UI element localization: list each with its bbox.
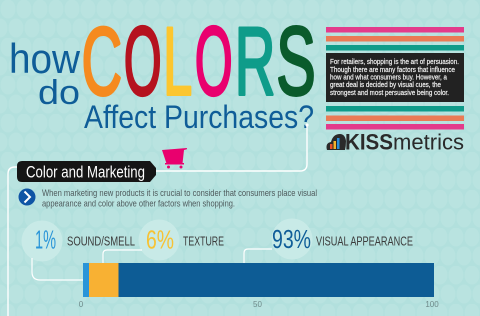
title: COLORS: S bbox=[276, 8, 316, 116]
intro text box bbox=[326, 53, 464, 102]
axis labels: 0 bbox=[79, 300, 84, 309]
axis labels: 50 bbox=[253, 300, 262, 309]
bottom stripes bbox=[326, 106, 464, 130]
intro text box: For retailers, shopping is the art of persuasion. bbox=[330, 59, 459, 66]
stat: 93% visual appearance: VISUAL APPEARANCE bbox=[316, 234, 413, 248]
stat: 1% sound/smell: SOUND/SMELL bbox=[67, 234, 135, 248]
text: marketing note: When marketing new products it is crucial to consider that consumers place visual bbox=[42, 188, 317, 199]
stat: 1% sound/smell bbox=[22, 220, 135, 280]
top stripes bbox=[326, 27, 464, 50]
icon: chevron bullet bbox=[18, 188, 36, 206]
stat: 93% visual appearance bbox=[244, 218, 413, 263]
intro text box: great deal is decided by visual cues, the bbox=[330, 82, 441, 89]
stat: 6% texture: TEXTURE bbox=[183, 234, 224, 248]
title: COLORS: L bbox=[163, 6, 192, 116]
intro text box: Though there are many factors that influence bbox=[330, 67, 455, 74]
title: how do bbox=[9, 35, 81, 112]
axis labels: 100 bbox=[425, 300, 439, 309]
heading: Color and Marketing: Color and Marketing bbox=[26, 164, 145, 182]
intro text box: strongest and most persuasive being color. bbox=[330, 90, 449, 97]
intro text box: how and what consumers buy. However, a bbox=[330, 74, 447, 82]
stat: 93% visual appearance: 93% bbox=[272, 224, 311, 254]
title: COLORS: C bbox=[82, 6, 122, 115]
panel: intro bbox=[326, 27, 464, 130]
stat: 1% sound/smell: 1% bbox=[35, 224, 56, 254]
stat: 6% texture: 6% bbox=[146, 224, 174, 254]
icon: cloud chart bbox=[326, 134, 346, 150]
connector line bbox=[8, 125, 307, 316]
stat: 6% texture bbox=[103, 220, 224, 263]
title: Affect Purchases?: Affect Purchases? bbox=[84, 99, 314, 135]
title: COLORS: O bbox=[195, 8, 233, 116]
title: COLORS: R bbox=[235, 6, 275, 115]
title bbox=[9, 6, 316, 135]
axis labels bbox=[79, 300, 439, 309]
icon: shopping cart bbox=[162, 148, 187, 168]
title: how do: how bbox=[9, 35, 81, 82]
logo: KISSmetrics: metrics bbox=[393, 130, 464, 154]
title: COLORS bbox=[82, 6, 316, 116]
logo: KISSmetrics: KISS bbox=[345, 130, 393, 154]
title: how do: do bbox=[38, 74, 80, 112]
text: marketing note bbox=[42, 188, 317, 210]
title: COLORS: O bbox=[124, 8, 162, 116]
logo: KISSmetrics bbox=[326, 130, 464, 154]
bar chart bbox=[79, 263, 439, 309]
text: marketing note: appearance and color above other factors when shopping. bbox=[42, 198, 235, 210]
